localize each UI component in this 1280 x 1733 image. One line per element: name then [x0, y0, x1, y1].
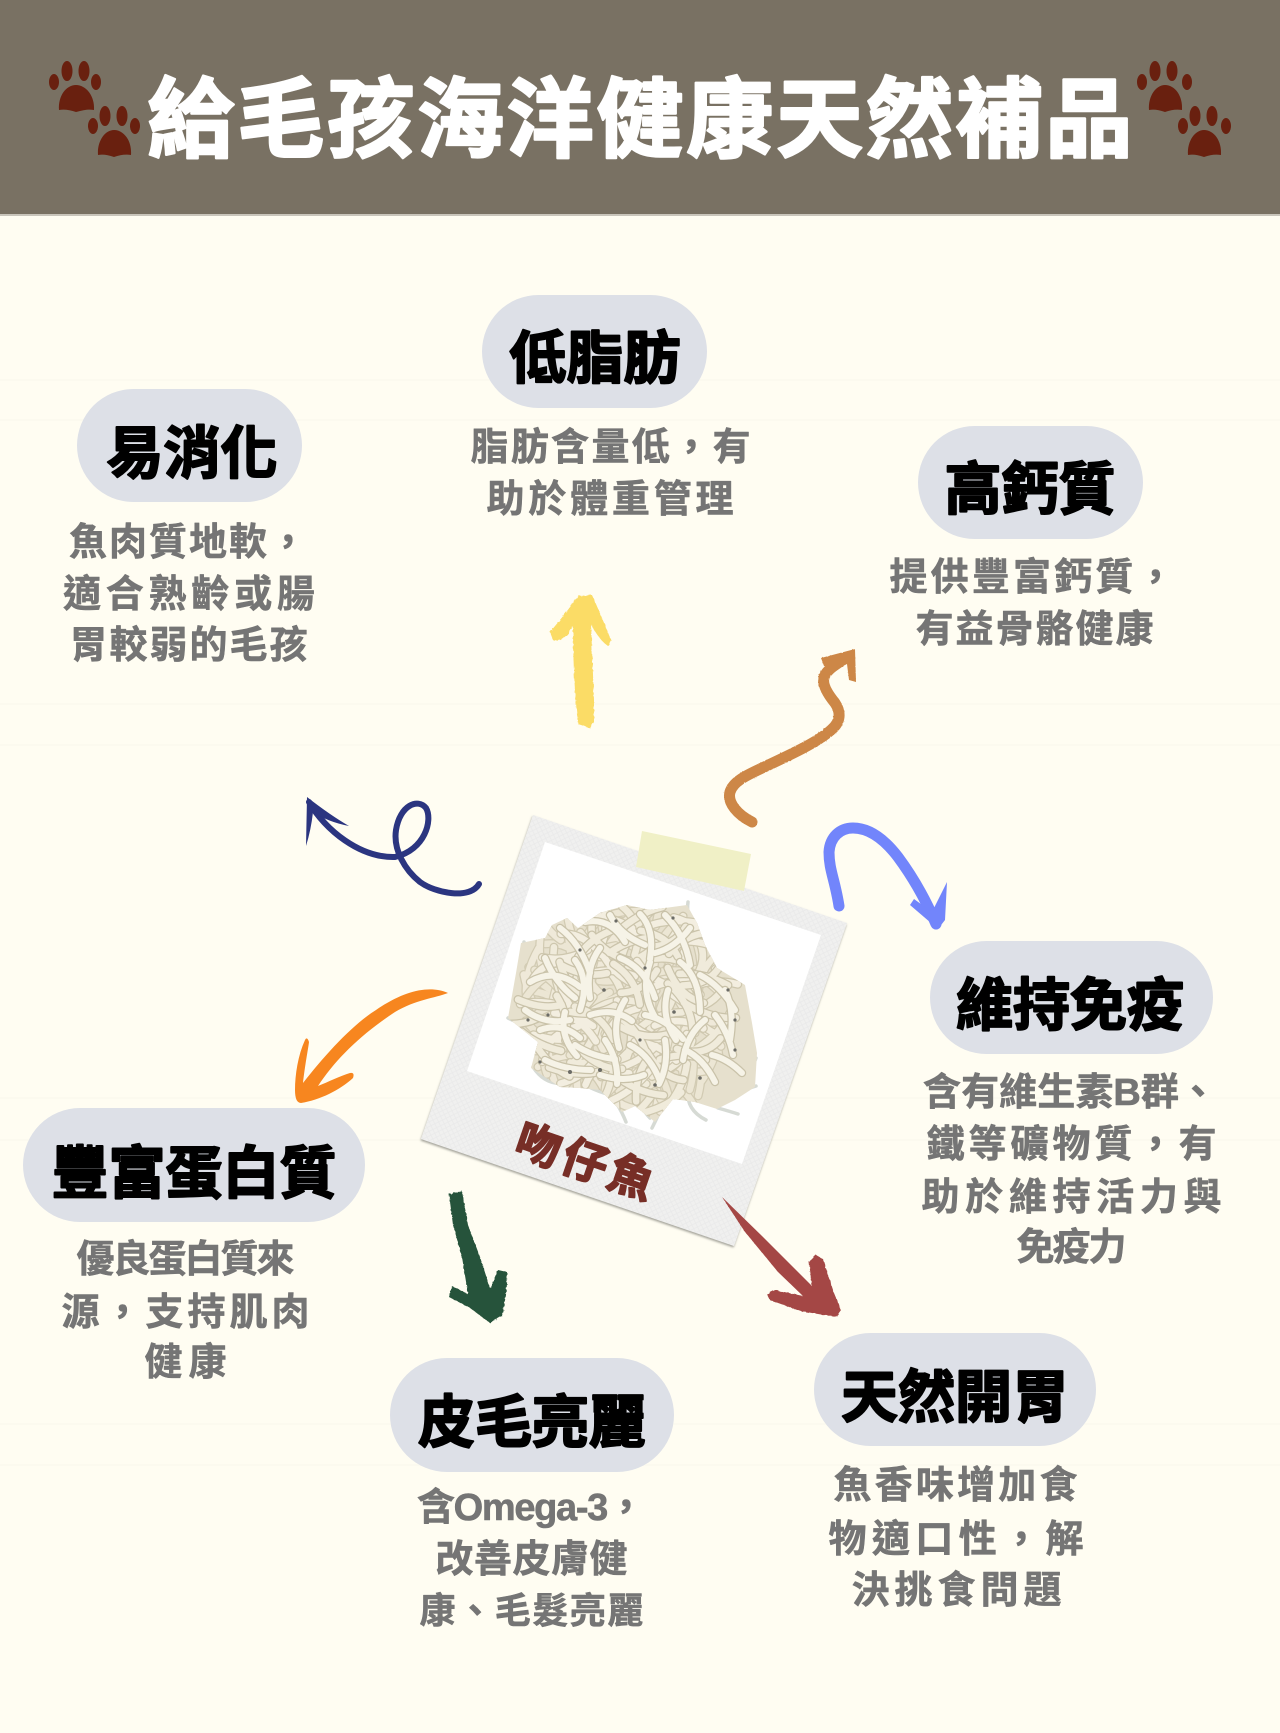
panel: 皮毛亮麗: 康、毛髮亮麗: [420, 1590, 644, 1631]
panel: 豐富蛋白質: 優良蛋白質來: [76, 1239, 294, 1281]
arrow: brown squiggle to 高鈣質: [730, 649, 856, 822]
panel: 皮毛亮麗: 皮毛亮麗: [418, 1391, 646, 1455]
photo area: [467, 842, 821, 1164]
icon: paw prints right: [1137, 61, 1231, 157]
panel: 易消化: [63, 389, 315, 667]
panel: 皮毛亮麗: [390, 1358, 674, 1631]
arrow: green down to 皮毛亮麗: [449, 1191, 507, 1323]
header banner: [0, 0, 1280, 216]
icon: paw prints left: [49, 61, 140, 157]
panel: 維持免疫: 鐵等礦物質，有: [926, 1124, 1216, 1166]
panel: 維持免疫: 含有維生素B群、: [923, 1072, 1217, 1114]
polaroid caption: 吻仔魚: [509, 1114, 665, 1211]
panel: 易消化: 魚肉質地軟，: [69, 522, 307, 564]
panel: 高鈣質: 高鈣質: [944, 458, 1116, 522]
fish eye specks: [526, 916, 737, 1087]
panel: 維持免疫: 免疫力: [1016, 1227, 1126, 1269]
panel: 低脂肪: 脂肪含量低，有: [470, 427, 750, 469]
panel: 天然開胃: 天然開胃: [841, 1366, 1069, 1430]
title: 給毛孩海洋健康天然補品: [148, 72, 1132, 169]
panel: 天然開胃: 決挑食問題: [852, 1570, 1062, 1612]
panel: 低脂肪: 助於體重管理: [486, 479, 734, 521]
panel: 豐富蛋白質: 豐富蛋白質: [52, 1142, 336, 1206]
tape: [636, 831, 751, 891]
polaroid frame: [421, 815, 847, 1246]
photo: polaroid of whitebait: [421, 815, 847, 1246]
panel: 豐富蛋白質: 健康: [144, 1342, 226, 1384]
panel: 易消化: 適合熟齡或腸: [63, 574, 315, 616]
arrow: yellow up to 低脂肪: [550, 595, 611, 728]
panel: 豐富蛋白質: 源，支持肌肉: [62, 1292, 310, 1334]
arrow: navy loop to 易消化: [306, 797, 479, 893]
arrow: orange curve to 豐富蛋白質: [295, 989, 448, 1103]
image: whitebait pile: [506, 900, 758, 1130]
panel: 維持免疫: [922, 941, 1222, 1269]
panel: 皮毛亮麗: 改善皮膚健: [436, 1539, 628, 1581]
panel: 易消化: 胃較弱的毛孩: [70, 625, 308, 667]
panel: 維持免疫: 助於維持活力與: [922, 1177, 1222, 1219]
panel: 豐富蛋白質: [23, 1108, 365, 1384]
panel: 維持免疫: 維持免疫: [956, 974, 1184, 1038]
panel: 高鈣質: 提供豐富鈣質，: [890, 557, 1174, 599]
panel: 皮毛亮麗: 含Omega-3，: [417, 1487, 645, 1529]
panel: 高鈣質: [890, 426, 1174, 651]
panel: 高鈣質: 有益骨骼健康: [916, 609, 1154, 651]
arrow: red diagonal to 天然開胃: [722, 1197, 841, 1317]
arrow: blue curve to 維持免疫: [829, 828, 947, 929]
panel: 天然開胃: [814, 1333, 1096, 1612]
panel: 天然開胃: 魚香味增加食: [834, 1465, 1078, 1507]
panel: 易消化: 易消化: [106, 422, 278, 486]
panel: 低脂肪: 低脂肪: [510, 327, 680, 391]
panel: 天然開胃: 物適口性，解: [828, 1519, 1084, 1561]
panel: 低脂肪: [470, 295, 750, 521]
